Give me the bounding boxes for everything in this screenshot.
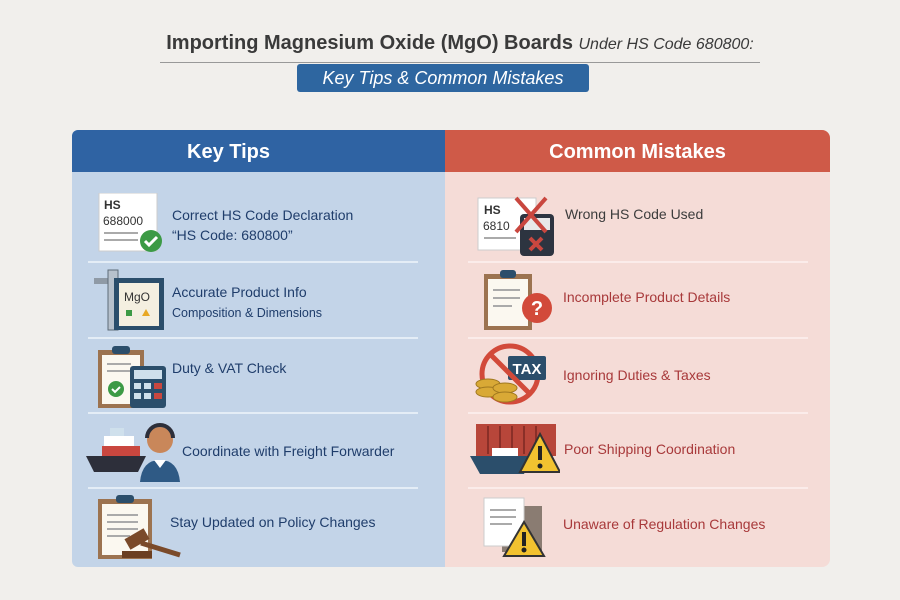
- subtitle banner: Key Tips & Common Mistakes: [323, 68, 563, 88]
- panel: key tips: [72, 130, 445, 567]
- text: tip 2: [172, 284, 322, 320]
- icon: wrong HS code: 6810: [483, 219, 510, 233]
- icon: ship warning: [470, 424, 560, 474]
- panel: common mistakes: [445, 130, 830, 567]
- icon: clipboard question: ?: [531, 298, 543, 320]
- heading: common mistakes: [445, 130, 830, 172]
- text: tip 4: Coordinate with Freight Forwarder: [182, 443, 394, 459]
- icon: clipboard gavel: [98, 495, 181, 559]
- icon: ship and agent: [86, 423, 180, 482]
- text: tip 3: Duty & VAT Check: [172, 360, 286, 376]
- text: mistake 5: Unaware of Regulation Changes: [563, 516, 765, 532]
- text: tip 1: Correct HS Code Declaration: [172, 207, 353, 223]
- text: mistake 1: Wrong HS Code Used: [565, 206, 703, 222]
- icon: docs warning: [484, 498, 546, 557]
- text: mistake 2: Incomplete Product Details: [563, 289, 730, 305]
- icon: MgO caliper: [94, 270, 164, 330]
- icon: no tax coins: TAX: [513, 361, 541, 378]
- text: mistake 4: Poor Shipping Coordination: [564, 441, 735, 457]
- icon: MgO caliper: MgO: [124, 290, 150, 304]
- icon: HS document check: [98, 193, 162, 252]
- icon: no tax coins: [476, 344, 546, 404]
- text: tip 5: Stay Updated on Policy Changes: [170, 514, 375, 530]
- heading: common mistakes: Common Mistakes: [549, 141, 726, 163]
- heading: key tips: Key Tips: [187, 141, 270, 163]
- text: tip 2: Accurate Product Info: [172, 284, 307, 300]
- text: mistake 3: Ignoring Duties & Taxes: [563, 367, 711, 383]
- heading: key tips: [72, 130, 445, 172]
- icon: clipboard calculator: [98, 346, 166, 408]
- subtitle banner: [297, 64, 589, 92]
- text: tip 1: [172, 207, 353, 243]
- icon: HS document check: 688000: [103, 214, 143, 228]
- text: tip 2: Composition & Dimensions: [172, 306, 322, 320]
- icon: wrong HS code: [478, 196, 554, 256]
- icon: clipboard question: [484, 270, 552, 330]
- icon: wrong HS code: HS: [484, 203, 501, 217]
- text: tip 1: “HS Code: 680800”: [172, 227, 293, 243]
- title: Importing Magnesium Oxide (MgO) Boards Under HS Code 680800:: [166, 32, 754, 54]
- icon: HS document check: HS: [104, 198, 121, 212]
